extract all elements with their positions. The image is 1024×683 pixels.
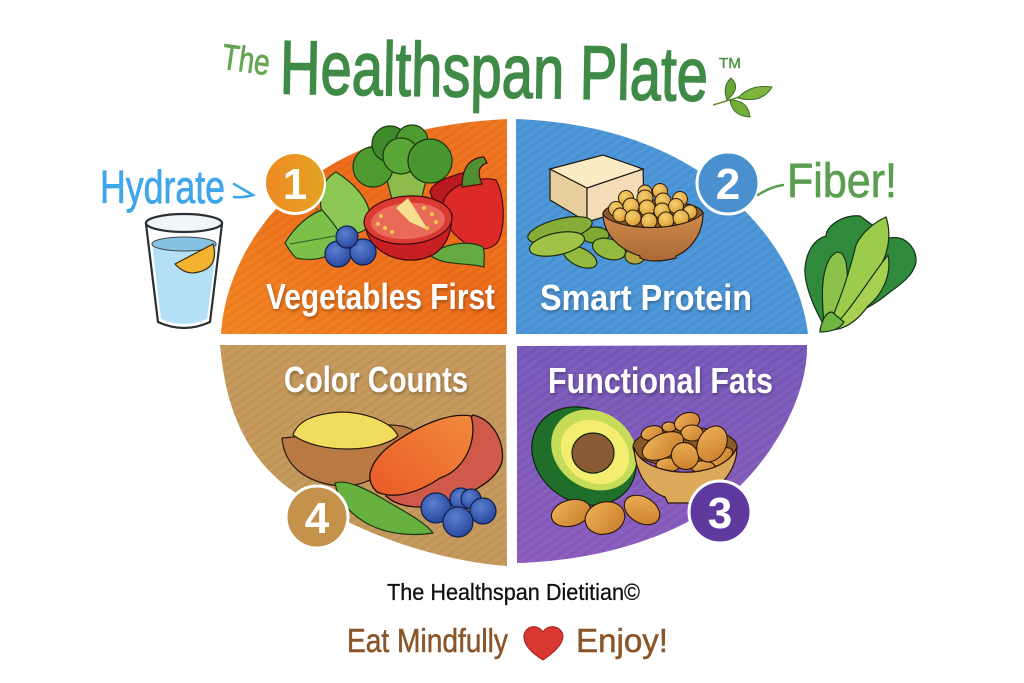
badge: 1 <box>264 153 326 215</box>
icon: tomato seeds <box>376 206 438 234</box>
credit: The Healthspan Dietitian© <box>387 579 640 605</box>
tagline: Enjoy! <box>576 622 668 659</box>
icon: blueberries <box>325 226 376 267</box>
icon: title leaves <box>713 78 772 117</box>
arrow: hydrate <box>234 184 253 197</box>
icon: tan blueberries <box>421 488 496 537</box>
label: vegetables first: Vegetables First <box>266 276 495 317</box>
icon: sweet potato <box>370 415 503 507</box>
icon: romaine <box>805 216 916 332</box>
badge: 3: 3 <box>708 489 732 538</box>
panel: functional fats <box>513 345 807 563</box>
icon: avocado <box>513 387 655 525</box>
tagline: Eat Mindfully <box>347 622 508 659</box>
icon: grain bowl <box>282 412 413 486</box>
icon: lettuce <box>285 172 484 267</box>
badge: 2 <box>697 152 759 214</box>
title: Healthspan Plate <box>279 25 709 118</box>
icon: almond bowl <box>633 409 737 503</box>
icon: broccoli <box>353 125 452 222</box>
title: TM <box>719 55 741 72</box>
label: functional fats: Functional Fats <box>548 360 773 401</box>
icon: tofu <box>550 155 644 222</box>
badge: 1: 1 <box>283 160 307 209</box>
panel: smart protein <box>516 119 808 334</box>
panel: color counts <box>220 345 507 566</box>
icon: edamame <box>525 211 645 273</box>
panel: vegetables first <box>221 119 507 334</box>
callout: hydrate: Hydrate <box>100 161 225 213</box>
icon: glass of water <box>146 214 222 328</box>
label: smart protein: Smart Protein <box>540 277 752 318</box>
badge: 4: 4 <box>305 494 330 543</box>
icon: tomato <box>362 193 454 260</box>
callout: fiber: Fiber! <box>787 155 897 208</box>
badge: 4 <box>286 486 348 548</box>
icon: chickpea bowl <box>603 184 703 261</box>
title: The <box>219 36 273 83</box>
badge: 3 <box>689 481 751 543</box>
icon: okra <box>335 482 433 534</box>
icon: red pepper <box>430 157 503 249</box>
icon: heart <box>524 627 563 660</box>
icon: loose almonds <box>548 489 665 539</box>
badge: 2: 2 <box>716 160 740 209</box>
tagline <box>347 622 668 660</box>
label: color counts: Color Counts <box>284 359 468 400</box>
